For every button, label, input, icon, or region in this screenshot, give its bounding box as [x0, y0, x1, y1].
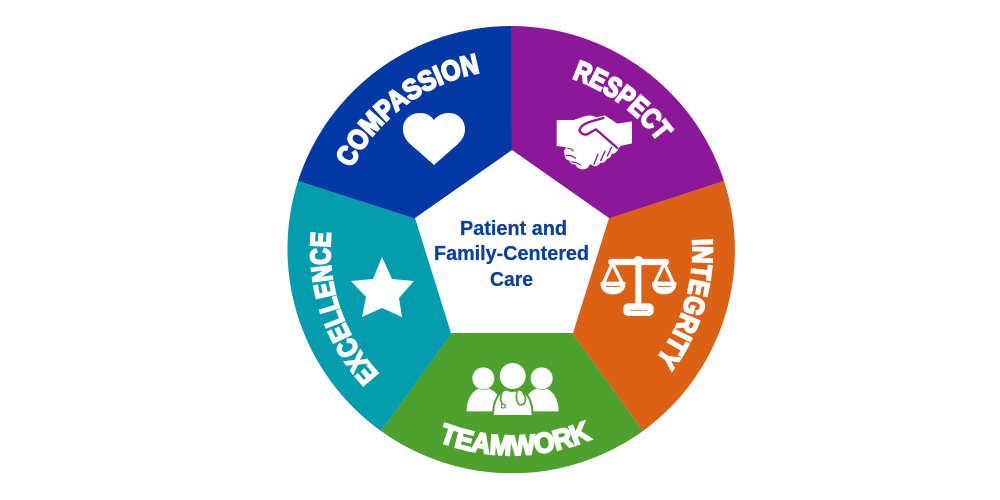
icon: star [351, 257, 414, 317]
label: integrity: INTEGRITY [658, 239, 714, 373]
icon: care team [467, 363, 559, 416]
center text: Patient and [460, 218, 567, 240]
center pentagon [415, 150, 609, 333]
panel: respect [511, 26, 724, 218]
icon: heart [403, 113, 465, 165]
panel: teamwork [381, 333, 643, 474]
label: teamwork: TEAMWORK [442, 420, 594, 456]
panel: integrity [572, 181, 735, 431]
label: respect: RESPECT [572, 60, 675, 139]
center text: Family-Centered [434, 243, 589, 265]
panel: compassion [298, 26, 512, 219]
label: excellence: EXCELLENCE [310, 232, 380, 387]
center text: Care [490, 269, 533, 291]
icon: scales of justice [602, 256, 675, 316]
value wheel [287, 26, 735, 474]
icon: handshake [557, 115, 632, 169]
panel: excellence [287, 181, 452, 431]
label: compassion: COMPASSION [336, 53, 480, 166]
center text [434, 218, 589, 291]
